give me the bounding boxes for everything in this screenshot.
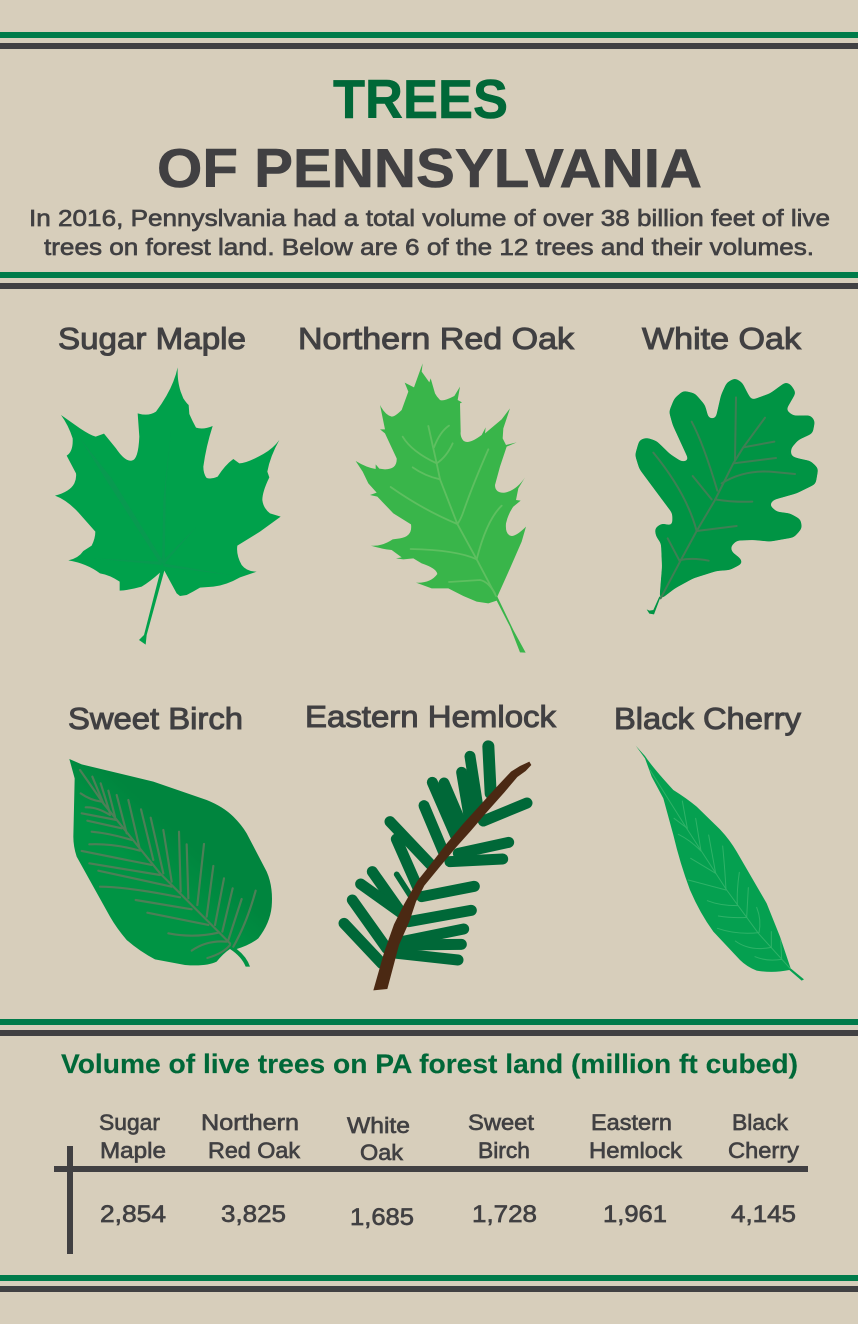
icon: sweet birch leaf — [69, 759, 272, 967]
panel: black cherry — [614, 701, 804, 981]
panel: northern red oak — [298, 321, 575, 653]
column: eastern hemlock — [589, 1110, 683, 1228]
column: white oak: White — [347, 1113, 410, 1138]
column: northern red oak: Northern — [201, 1110, 299, 1135]
intro text — [29, 205, 830, 260]
panel: white oak — [635, 321, 818, 614]
column: sugar maple: Sugar — [99, 1110, 160, 1135]
icon: sugar maple leaf — [55, 367, 281, 645]
icon: black cherry leaf — [636, 746, 804, 981]
column: sugar maple: 2,854 — [100, 1201, 166, 1228]
title: TREES — [333, 68, 508, 130]
icon: northern red oak leaf — [356, 363, 526, 653]
column: sweet birch: 1,728 — [472, 1201, 537, 1228]
title — [157, 68, 702, 199]
panel: sugar maple — [55, 321, 281, 645]
column: northern red oak: 3,825 — [221, 1201, 286, 1228]
panel: eastern hemlock — [305, 699, 557, 990]
column: sugar maple: Maple — [100, 1138, 166, 1163]
icon: white oak leaf — [635, 378, 818, 614]
label: northern red oak: Northern Red Oak — [298, 321, 575, 356]
column: sweet birch — [468, 1110, 537, 1228]
column: black cherry: Cherry — [728, 1138, 799, 1163]
title: OF PENNSYLVANIA — [157, 137, 702, 199]
intro text: In 2016, Pennyslvania had a total volume of over 38 billion feet of live — [29, 205, 830, 231]
panel: sweet birch — [68, 701, 272, 967]
column: eastern hemlock: 1,961 — [603, 1201, 667, 1228]
icon: eastern hemlock sprig — [344, 746, 531, 990]
column: black cherry — [728, 1110, 799, 1228]
table heading: Volume of live trees on PA forest land (million ft cubed) — [61, 1049, 798, 1079]
label: black cherry: Black Cherry — [614, 701, 802, 736]
column: eastern hemlock: Eastern — [591, 1110, 672, 1135]
label: sugar maple: Sugar Maple — [58, 321, 246, 356]
label: eastern hemlock: Eastern Hemlock — [305, 699, 557, 734]
label: white oak: White Oak — [642, 321, 802, 356]
column: white oak: 1,685 — [350, 1204, 414, 1231]
table: tree volumes — [54, 1110, 808, 1254]
column: northern red oak — [201, 1110, 301, 1228]
column: sweet birch: Birch — [478, 1138, 530, 1163]
column: sweet birch: Sweet — [468, 1110, 534, 1135]
column: white oak — [347, 1113, 414, 1231]
column: sugar maple — [99, 1110, 166, 1228]
column: black cherry: 4,145 — [731, 1201, 796, 1228]
column: white oak: Oak — [360, 1140, 404, 1165]
intro text: trees on forest land. Below are 6 of the 12 trees and their volumes. — [44, 234, 814, 260]
label: sweet birch: Sweet Birch — [68, 701, 243, 736]
column: northern red oak: Red Oak — [208, 1138, 301, 1163]
column: eastern hemlock: Hemlock — [589, 1138, 683, 1163]
column: black cherry: Black — [732, 1110, 789, 1135]
